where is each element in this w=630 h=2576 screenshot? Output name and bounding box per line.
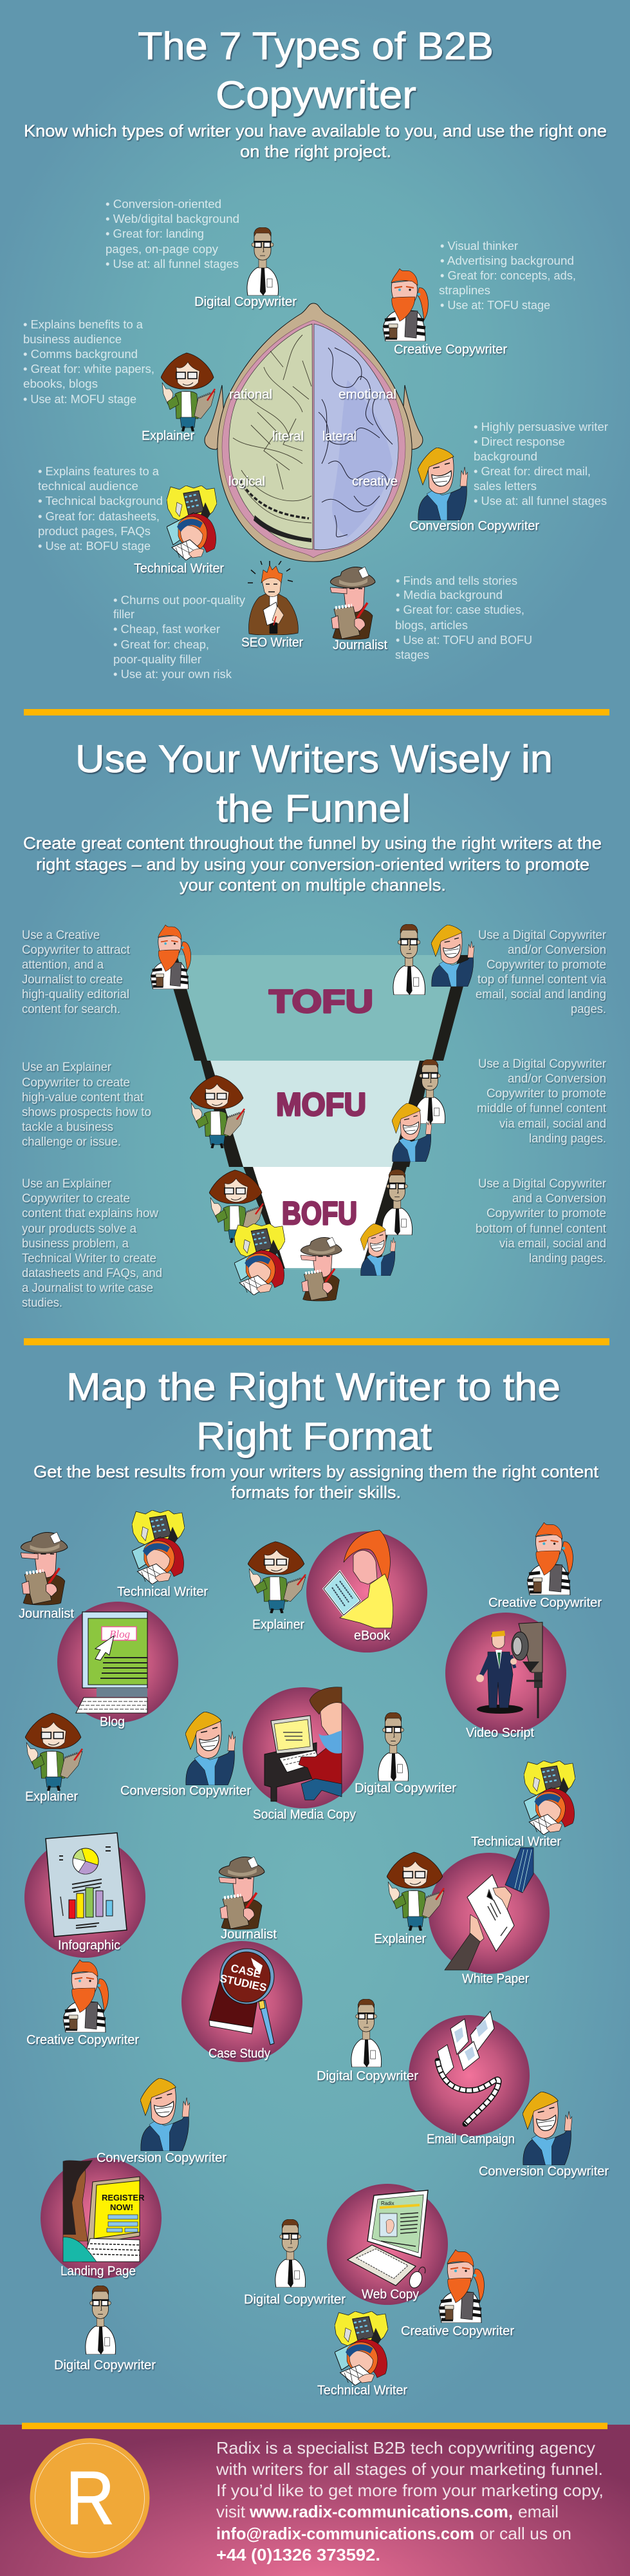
format: Landing Page: NOW! xyxy=(110,2202,133,2212)
writer: Technical Writer: Technical Writer xyxy=(134,562,224,576)
stage label: BOFU: BOFU xyxy=(282,1195,357,1231)
writer label: Conversion Copywriter: Conversion Copywriter xyxy=(97,2151,227,2165)
writer: Creative Copywriter xyxy=(383,240,576,357)
writer: Conversion Copywriter: sales letters xyxy=(474,480,537,493)
title: Copywriter xyxy=(216,73,416,117)
brain diagram: lateral xyxy=(322,430,357,444)
heading: funnel: the Funnel xyxy=(216,787,411,830)
writer: Creative Copywriter: • Use at: TOFU stage xyxy=(440,299,550,312)
format: Blog xyxy=(57,1602,178,1729)
writer: Conversion Copywriter: background xyxy=(474,450,537,463)
writer label: Technical Writer: Technical Writer xyxy=(471,1835,561,1849)
text: BOFU left: a Journalist to write case xyxy=(22,1282,153,1295)
funnel intro text: Create great content throughout the funnel by using the right writers at the xyxy=(23,833,602,853)
footer text: info@radix-communications.com xyxy=(216,2524,474,2543)
footer text: www.radix-communications.com, xyxy=(249,2502,513,2521)
text: BOFU right: Copywriter to promote xyxy=(486,1207,606,1220)
text: MOFU left: Copywriter to create xyxy=(22,1076,130,1090)
text: MOFU right: and/or Conversion xyxy=(508,1072,606,1086)
writer label: Conversion Copywriter: Conversion Copywriter xyxy=(479,2164,609,2179)
brain diagram: emotional xyxy=(338,388,396,402)
format intro text xyxy=(33,1462,599,1502)
writer label: Journalist xyxy=(219,1857,277,1942)
writer label: Creative Copywriter xyxy=(401,2249,514,2338)
text: BOFU right: and a Conversion xyxy=(512,1192,606,1206)
writer: Explainer: business audience xyxy=(23,333,122,346)
text: BOFU left: content that explains how xyxy=(22,1207,158,1220)
writer: Technical Writer: • Use at: BOFU stage xyxy=(38,540,151,553)
writer: Explainer: ebooks, blogs xyxy=(23,377,98,390)
brain diagram: logical xyxy=(228,475,265,489)
writer label: Technical Writer xyxy=(317,2311,407,2398)
writer: Digital Copywriter: • Conversion-oriented xyxy=(106,198,221,211)
writer: SEO Writer: • Cheap, fast worker xyxy=(113,623,220,636)
format: Blog: Blog xyxy=(109,1628,130,1640)
heading: funnel xyxy=(75,737,553,830)
writer: Journalist: • Media background xyxy=(396,589,503,601)
writer label: Explainer: Explainer xyxy=(252,1618,304,1632)
writer: Creative Copywriter: • Visual thinker xyxy=(440,240,518,252)
writer: SEO Writer: poor-quality filler xyxy=(113,653,201,666)
logo: Radix R xyxy=(30,2438,149,2558)
footer text: with writers for all stages of your marketing funnel. xyxy=(216,2459,603,2479)
writer: Conversion Copywriter: • Use at: all funnel stages xyxy=(474,495,607,507)
writer label: Digital Copywriter xyxy=(54,2286,156,2372)
format: White Paper xyxy=(429,1848,550,1986)
format intro text: formats for their skills. xyxy=(231,1482,401,1502)
text: BOFU right: via email, social and xyxy=(499,1237,606,1251)
funnel graphic xyxy=(163,955,472,1269)
writer: Explainer xyxy=(23,318,215,443)
writer label: Journalist: Journalist xyxy=(221,1927,277,1942)
text: TOFU left: content for search. xyxy=(22,1003,120,1016)
writer: Explainer: Explainer xyxy=(142,429,194,443)
text: MOFU right: Copywriter to promote xyxy=(486,1087,606,1101)
writer label: Creative Copywriter: Creative Copywriter xyxy=(488,1596,602,1610)
writer: Digital Copywriter: • Great for: landing xyxy=(106,227,204,240)
title xyxy=(138,24,494,117)
brain diagram: literal xyxy=(272,430,304,444)
stage label: MOFU: MOFU xyxy=(276,1086,366,1122)
format: Landing Page: Landing Page xyxy=(60,2264,136,2278)
writer: Conversion Copywriter: • Great for: direct mail, xyxy=(474,465,591,478)
logo: Radix R: R xyxy=(66,2456,115,2540)
text: BOFU left: Use an Explainer xyxy=(22,1177,112,1191)
footer text: If you’d like to get more from your marketing copy, xyxy=(216,2481,604,2500)
writer: Explainer: • Great for: white papers, xyxy=(23,363,154,375)
writer label: Explainer: Explainer xyxy=(25,1790,78,1804)
writer label: Technical Writer: Technical Writer xyxy=(117,1585,208,1599)
text: TOFU left: Journalist to create xyxy=(22,973,123,987)
text: MOFU right: landing pages. xyxy=(529,1132,606,1146)
format: Web Copy xyxy=(327,2184,448,2305)
writer: Technical Writer: • Explains features to a xyxy=(38,465,160,478)
text: TOFU left: attention, and a xyxy=(22,958,104,972)
format: eBook: eBook xyxy=(354,1629,391,1643)
text: TOFU right: and/or Conversion xyxy=(508,943,606,957)
text: TOFU right xyxy=(476,929,607,1016)
writer label: Conversion Copywriter xyxy=(120,1712,251,1798)
format: Landing Page: REGISTER xyxy=(102,2193,145,2202)
text: MOFU right: Use a Digital Copywriter xyxy=(478,1057,607,1071)
text: BOFU right: bottom of funnel content xyxy=(476,1222,607,1236)
text: MOFU right: middle of funnel content xyxy=(477,1102,607,1115)
text: BOFU left: studies. xyxy=(22,1296,62,1310)
text: MOFU left: shows prospects how to xyxy=(22,1106,151,1119)
format: Web Copy: Web Copy xyxy=(362,2287,419,2302)
text: MOFU right xyxy=(477,1057,607,1146)
text: TOFU right: pages. xyxy=(571,1003,606,1016)
format: White Paper: White Paper xyxy=(462,1972,529,1986)
text: TOFU left: Copywriter to attract xyxy=(22,943,131,957)
funnel writers: TOFU xyxy=(151,924,474,995)
writer label: Technical Writer xyxy=(471,1761,575,1849)
text: TOFU right: top of funnel content via xyxy=(477,973,606,987)
format: Case Study: STUDIES xyxy=(219,1972,268,1994)
writer label: Conversion Copywriter xyxy=(97,2078,227,2165)
writer label: Digital Copywriter xyxy=(355,1712,456,1795)
writer: Journalist xyxy=(330,567,532,661)
text: TOFU right: Use a Digital Copywriter xyxy=(478,929,607,942)
format: Video Script: Video Script xyxy=(466,1726,534,1740)
format: Case Study: CASE xyxy=(230,1962,262,1980)
writer: Technical Writer: product pages, FAQs xyxy=(38,525,151,538)
writer: Digital Copywriter xyxy=(106,198,297,309)
heading: funnel: Use Your Writers Wisely in xyxy=(75,737,553,781)
funnel intro text xyxy=(23,833,602,895)
gold divider xyxy=(24,709,609,715)
text: BOFU right xyxy=(476,1177,607,1265)
text: BOFU left xyxy=(22,1177,162,1310)
writer label: Journalist xyxy=(19,1532,74,1621)
writer: Conversion Copywriter: Conversion Copywriter xyxy=(409,519,539,533)
writer label: Digital Copywriter: Digital Copywriter xyxy=(355,1781,456,1795)
format: Email Campaign xyxy=(409,2011,530,2146)
writer label: Digital Copywriter: Digital Copywriter xyxy=(54,2358,156,2372)
text: TOFU right: Copywriter to promote xyxy=(486,958,606,972)
writer label: Digital Copywriter: Digital Copywriter xyxy=(244,2293,346,2307)
brain diagram: creative xyxy=(352,475,398,489)
writer: Journalist: • Finds and tells stories xyxy=(396,574,517,587)
gold divider xyxy=(24,1338,609,1345)
intro text: on the right project. xyxy=(240,142,391,161)
heading: map writers to formats: Map the Right Writer to the xyxy=(66,1365,561,1408)
format: Landing Page xyxy=(41,2157,162,2278)
writer: SEO Writer: SEO Writer xyxy=(241,636,303,650)
format: Infographic xyxy=(24,1833,145,1958)
funnel intro text: right stages – and by using your conversion-oriented writers to promote xyxy=(36,855,589,874)
writer: Technical Writer: technical audience xyxy=(38,480,138,493)
writer: SEO Writer xyxy=(113,561,303,681)
writer label: Conversion Copywriter: Conversion Copywriter xyxy=(120,1784,251,1798)
format: Video Script xyxy=(445,1613,566,1740)
writer label: Digital Copywriter: Digital Copywriter xyxy=(317,2069,418,2083)
writer label: Explainer xyxy=(374,1852,444,1946)
writer label: Creative Copywriter: Creative Copywriter xyxy=(401,2324,514,2338)
writer: Journalist: blogs, articles xyxy=(395,619,468,632)
text: BOFU left: business problem, a xyxy=(22,1237,129,1251)
format: Social Media Copy xyxy=(243,1687,364,1822)
text: MOFU left: Use an Explainer xyxy=(22,1061,112,1074)
writer label: Creative Copywriter xyxy=(26,1960,139,2047)
writer label: Technical Writer: Technical Writer xyxy=(317,2383,407,2398)
brain diagram xyxy=(205,303,423,562)
writer: Journalist: stages xyxy=(395,649,429,661)
writer label: Creative Copywriter: Creative Copywriter xyxy=(26,2033,139,2047)
funnel intro text: your content on multiple channels. xyxy=(180,875,446,895)
writer: Digital Copywriter: pages, on-page copy xyxy=(106,243,218,256)
format: Infographic: Infographic xyxy=(58,1938,120,1953)
text: TOFU left xyxy=(22,929,131,1016)
funnel writers: MOFU xyxy=(190,1059,445,1162)
stage label: TOFU: TOFU xyxy=(269,983,373,1019)
text: MOFU left: high-value content that xyxy=(22,1091,144,1104)
writer: Creative Copywriter: • Advertising background xyxy=(440,254,574,267)
writer label: Journalist: Journalist xyxy=(19,1607,74,1621)
intro text: Know which types of writer you have available to you, and use the right one xyxy=(24,121,607,140)
writer label: Explainer xyxy=(25,1713,82,1804)
writer: Digital Copywriter: • Use at: all funnel stages xyxy=(106,258,239,270)
format: eBook xyxy=(306,1530,427,1653)
format: Email Campaign: Email Campaign xyxy=(427,2132,515,2146)
writer label: Digital Copywriter xyxy=(317,1999,418,2083)
writer: Technical Writer: • Great for: datasheets, xyxy=(38,510,160,523)
writer: Journalist: Journalist xyxy=(333,638,387,652)
writer: SEO Writer: filler xyxy=(113,608,134,621)
writer label: Technical Writer xyxy=(117,1510,208,1599)
writer: Explainer: • Explains benefits to a xyxy=(23,318,144,331)
writer label: Digital Copywriter xyxy=(244,2219,346,2307)
format: Blog: Blog xyxy=(100,1715,125,1729)
format: Web Copy: Radix xyxy=(381,2201,394,2206)
text: BOFU left: Copywriter to create xyxy=(22,1192,130,1206)
writer: Digital Copywriter: • Web/digital background xyxy=(106,213,239,225)
format intro text: Get the best results from your writers by assigning them the right content xyxy=(33,1462,599,1481)
text: TOFU right: email, social and landing xyxy=(476,988,606,1001)
writer: Creative Copywriter: straplines xyxy=(439,284,490,297)
text: BOFU left: your products solve a xyxy=(22,1222,136,1236)
footer text: Radix is a specialist B2B tech copywriting agency xyxy=(216,2438,595,2458)
footer text: email xyxy=(518,2502,559,2521)
writer: Conversion Copywriter: • Direct response xyxy=(474,435,565,448)
writer: Technical Writer: • Technical background xyxy=(38,495,163,507)
writer: Creative Copywriter: • Great for: concepts, ads, xyxy=(440,269,576,282)
text: BOFU left: Technical Writer to create xyxy=(22,1252,156,1265)
writer: Creative Copywriter: Creative Copywriter xyxy=(394,343,507,357)
writer label: Creative Copywriter xyxy=(488,1522,602,1610)
text: BOFU right: Use a Digital Copywriter xyxy=(478,1177,607,1191)
funnel writers: BOFU xyxy=(209,1170,412,1301)
writer label: Conversion Copywriter xyxy=(479,2092,609,2179)
text: TOFU left: Use a Creative xyxy=(22,929,100,942)
writer: Digital Copywriter: Digital Copywriter xyxy=(194,295,297,309)
writer: Explainer: • Use at: MOFU stage xyxy=(23,393,136,406)
text: MOFU right: via email, social and xyxy=(499,1117,606,1131)
writer: Conversion Copywriter: • Highly persuasive writer xyxy=(474,421,608,433)
brain diagram: rational xyxy=(229,388,272,402)
text: MOFU left: tackle a business xyxy=(22,1121,113,1134)
footer text: or call us on xyxy=(479,2524,571,2543)
format: Social Media Copy: Social Media Copy xyxy=(253,1808,356,1822)
text: BOFU left: datasheets and FAQs, and xyxy=(22,1267,162,1280)
title: The 7 Types of B2B xyxy=(138,24,494,68)
writer: Journalist: • Use at: TOFU and BOFU xyxy=(396,634,532,647)
writer: Explainer: • Comms background xyxy=(23,348,138,361)
footer text xyxy=(216,2438,604,2564)
writer: SEO Writer: • Great for: cheap, xyxy=(113,638,209,651)
text: MOFU left: challenge or issue. xyxy=(22,1135,121,1149)
writer: Conversion Copywriter xyxy=(409,421,608,533)
footer text: +44 (0)1326 373592. xyxy=(216,2545,380,2564)
format: Case Study: Case Study xyxy=(208,2047,270,2061)
footer panel xyxy=(0,2423,630,2576)
text: BOFU right: landing pages. xyxy=(529,1252,606,1265)
text: TOFU left: high-quality editorial xyxy=(22,988,129,1001)
writer: Journalist: • Great for: case studies, xyxy=(396,603,524,616)
footer text: visit xyxy=(216,2502,246,2521)
writer: SEO Writer: • Churns out poor-quality xyxy=(113,594,245,607)
text: MOFU left xyxy=(22,1061,151,1149)
writer label: Explainer: Explainer xyxy=(374,1932,426,1946)
intro text xyxy=(24,121,607,161)
format: Case Study xyxy=(181,1941,302,2062)
heading: map writers to formats: Right Format xyxy=(196,1415,432,1458)
writer label: Explainer xyxy=(248,1542,306,1632)
writer: SEO Writer: • Use at: your own risk xyxy=(113,668,232,681)
writer: Technical Writer xyxy=(38,465,224,576)
heading: map writers to formats xyxy=(66,1365,561,1458)
